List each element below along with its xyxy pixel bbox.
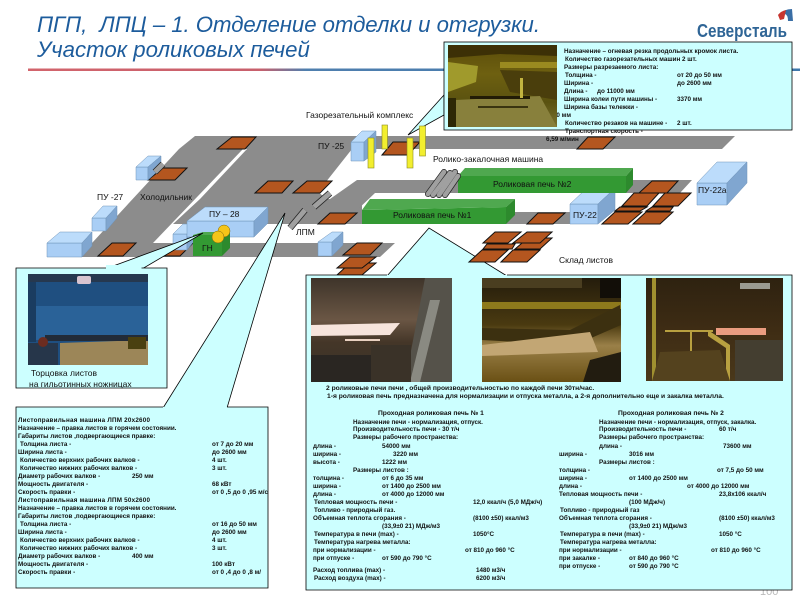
text: LPM specs: Листоправильная машина ЛПМ 20х2600 (18, 417, 150, 424)
text: furnace 1 specs: (33,9±0 21) МДж/м3 (382, 523, 441, 530)
text: furnace 1 specs: от 1400 до 2500 мм (382, 483, 441, 490)
text: furnace 1 specs: Проходная роликовая печь № 1 (378, 410, 484, 417)
text: furnace 1 specs: 1222 мм (382, 459, 407, 466)
text: furnace 1 specs: высота - (313, 459, 340, 466)
text: gas cutting specs: Ширина - (564, 80, 593, 87)
text: LPM specs: от 16 до 50 мм (212, 521, 257, 528)
text: LPM specs: Ширина листа - (18, 529, 67, 536)
title rule (28, 68, 800, 71)
text: gas cutting specs: до 2600 мм (677, 80, 712, 87)
text: furnace 1 specs: при нормализации - (313, 547, 376, 554)
scheme labels (97, 110, 727, 265)
box: PU-28 (187, 207, 268, 237)
text: LPM specs: Количество нижних рабочих валков - (20, 544, 137, 552)
text: LPM specs: 3 шт. (212, 545, 227, 552)
scheme labels: Ролико-закалочная машина (433, 154, 543, 164)
text: furnace 2 specs: 73600 мм (723, 443, 752, 450)
text: LPM specs: Мощность двигателя - (18, 561, 88, 568)
text: furnace intro: 2 роликовые печи печи , общей производительностью по каждой печи 30тн/час. (326, 384, 594, 392)
scheme labels: Роликовая печь №2 (493, 179, 572, 189)
text: furnace 1 specs: от 590 до 790 °С (382, 554, 432, 562)
scheme labels: Склад листов (559, 255, 613, 265)
scheme labels: Газорезательный комплекс (306, 110, 414, 120)
text: furnace 2 specs: длина - (559, 483, 582, 490)
text: LPM specs: от 0 ,5 до 0 ,95 м/с (212, 489, 269, 496)
text: furnace 2 specs: Температура в печи (max) - (560, 531, 645, 538)
blue and green units (47, 131, 747, 257)
caption: Торцовка листов (31, 368, 97, 378)
text: LPM specs: 3 шт. (212, 465, 227, 472)
callout pointer: furnaces (387, 228, 507, 276)
scheme labels: ЛПМ (296, 227, 315, 237)
panel: guillotine shears (16, 265, 167, 389)
text: furnace 2 specs: Назначение печи - нормализация, отпуск, закалка. (599, 419, 757, 426)
box: cooler (136, 156, 161, 180)
text: furnace intro (326, 384, 724, 400)
title (36, 12, 540, 62)
photo: furnace 2 (646, 278, 783, 381)
text: LPM specs: 100 кВт (212, 561, 235, 568)
LPM rollers (155, 164, 330, 228)
text: LPM specs: Количество верхних рабочих валков - (20, 536, 140, 544)
box: PU-22a (697, 162, 747, 205)
panel: furnaces (306, 275, 792, 590)
callout pointer: LPM (163, 213, 285, 408)
text: gas cutting specs: Количество резаков на машине - (565, 120, 667, 127)
text: LPM specs: Назначение – правка листов в горячем состоянии. (18, 505, 177, 512)
text: furnace 1 specs: Производительность печи - 30 т/ч (353, 426, 460, 433)
text: LPM specs: от 0 ,4 до 0 ,8 м/ (212, 569, 261, 576)
text: furnace 2 specs (559, 410, 775, 570)
warehouse sheet stack (337, 232, 552, 275)
text: furnace 1 specs: ширина - (313, 483, 341, 490)
text: furnace 1 specs: 54000 мм (382, 443, 411, 450)
box: PU-25 (351, 131, 376, 161)
text: LPM specs: Диаметр рабочих валков - (18, 472, 100, 480)
text: furnace 1 specs: (8100 ±50) ккал/м3 (473, 515, 529, 522)
text: furnace 1 specs: 12,0 ккал/ч (5,0 МДж/ч) (473, 499, 542, 506)
text: furnace 1 specs: от 4000 до 12000 мм (382, 491, 445, 498)
text: LPM specs: Ширина листа - (18, 449, 67, 456)
text: furnace 2 specs: 1050 °С (719, 530, 742, 538)
text: furnace 2 specs: 23,8х106 ккал/ч (719, 491, 767, 498)
title: Участок роликовых печей (36, 37, 310, 62)
text: furnace 2 specs: от 1400 до 2500 мм (629, 475, 688, 482)
roller quenching machine pipes (428, 172, 458, 195)
text: furnace 1 specs: длина - (313, 443, 336, 450)
text: furnace 1 specs: толщина - (313, 475, 344, 482)
text: gas cutting specs: Длина - (564, 88, 588, 95)
text: furnace 1 specs: Температура в печи (max) - (314, 531, 399, 538)
text: LPM specs: 250 мм (132, 473, 154, 480)
text: furnace 1 specs: Тепловая мощность печи - (314, 499, 397, 506)
text: gas cutting specs: Назначение – огневая резка продольных кромок листа. (564, 48, 739, 55)
text: gas cutting specs: Толщина - (565, 72, 596, 79)
text: furnace 1 specs: от 6 до 35 мм (382, 475, 424, 482)
photo: guillotine (28, 274, 148, 365)
caption (29, 368, 132, 389)
text: gas cutting specs: от 20 до 50 мм (677, 72, 722, 79)
furnace 1 (362, 199, 515, 224)
GN unit (193, 225, 230, 256)
text: furnace 1 specs: 1050°С (473, 530, 495, 538)
yellow posts (368, 125, 426, 168)
box: PU-22 (570, 188, 615, 224)
text: furnace 1 specs: при отпуске - (313, 555, 354, 562)
text: furnace 1 specs: Размеры рабочего пространства: (353, 433, 458, 441)
text: gas cutting specs: Транспортная скорость - (565, 128, 643, 135)
scheme labels: ПУ-22а (698, 185, 727, 195)
text: LPM specs: Скорость правки - (18, 569, 75, 576)
text: furnace 1 specs: 6200 м3/ч (476, 575, 506, 582)
text: furnace 2 specs: от 4000 до 12000 мм (687, 483, 750, 490)
text: furnace 1 specs: Топливо - природный газ. (314, 506, 395, 514)
text: LPM specs: от 7 до 20 мм (212, 441, 254, 448)
scheme labels: Холодильник (140, 192, 192, 202)
text: LPM specs: Количество верхних рабочих валков - (20, 456, 140, 464)
text: furnace 2 specs: ширина - (559, 475, 587, 482)
plant floor scheme (78, 136, 735, 257)
text: furnace 1 specs (313, 410, 542, 582)
text: furnace 1 specs: от 810 до 960 °С (465, 546, 515, 554)
text: furnace 1 specs: 1480 м3/ч (476, 567, 506, 574)
text: furnace 2 specs: Проходная роликовая печь № 2 (618, 410, 724, 417)
text: furnace 2 specs: от 7,5 до 50 мм (717, 467, 764, 474)
text: LPM specs: Габариты листов ,подвергающиеся правке: (18, 432, 155, 440)
panel: LPM specs (16, 407, 269, 588)
text: furnace 1 specs: Назначение печи - нормализация, отпуск. (353, 419, 483, 426)
text: furnace 1 specs: Расход воздуха (max) - (314, 575, 386, 582)
text: LPM specs: 400 мм (132, 553, 154, 560)
photo: furnace roller table (482, 278, 621, 382)
text: furnace 1 specs: 3220 мм (393, 451, 418, 458)
text: furnace 1 specs: ширина - (313, 451, 341, 458)
text: gas cutting specs: Размеры разрезаемого листа: (564, 64, 658, 71)
text: LPM specs: Мощность двигателя - (18, 481, 88, 488)
text: furnace 2 specs: при нормализации - (559, 547, 622, 554)
text: LPM specs (18, 417, 269, 576)
text: LPM specs: Габариты листов ,подвергающиеся правке: (18, 512, 155, 520)
text: furnace 2 specs: от 840 до 960 °С (629, 554, 679, 562)
text: furnace 2 specs: длина - (599, 443, 622, 450)
text: furnace 2 specs: Производительность печи - (599, 426, 686, 433)
text: LPM specs: 4 шт. (212, 457, 227, 464)
sheets on the floor (98, 137, 691, 256)
page number: 100 (760, 586, 778, 598)
photo: furnace exit (311, 278, 452, 382)
text: LPM specs: до 2600 мм (212, 449, 247, 456)
scheme labels: ПУ -25 (318, 141, 344, 151)
text: LPM specs: Назначение – правка листов в горячем состоянии. (18, 425, 177, 432)
scheme labels: ПУ – 28 (209, 209, 240, 219)
box: near GN (173, 224, 198, 250)
text: gas cutting specs: Количество газорезательных машин 2 шт. (565, 56, 697, 63)
callout pointer: gas cutting complex (408, 95, 444, 135)
text: furnace 2 specs: Объемная теплота сгорания - (559, 514, 652, 522)
photo: gas cutting machine (448, 45, 557, 127)
text: furnace 1 specs: длина - (313, 491, 336, 498)
text: furnace 1 specs: Размеры листов : (353, 467, 409, 474)
text: furnace 2 specs: от 590 до 790 °С (629, 562, 679, 570)
text: furnace 2 specs: 60 т/ч (719, 426, 737, 433)
text: furnace 1 specs: Температура нагрева металла: (314, 539, 411, 546)
text: gas cutting specs: 2 шт. (677, 120, 692, 127)
scheme labels: ГН (202, 243, 213, 253)
text: gas cutting specs: Ширина базы тележки - (564, 103, 638, 111)
box: near stack (318, 232, 343, 256)
text: LPM specs: Количество нижних рабочих валков - (20, 464, 137, 472)
text: furnace intro: 1-я роликовая печь предназначена для нормализации и отпуска металла, а 2-я дополнительно еще и закалка металла. (327, 393, 724, 400)
text: furnace 2 specs: (33,9±0 21) МДж/м3 (629, 523, 688, 530)
text: furnace 2 specs: от 810 до 960 °С (711, 546, 761, 554)
text: furnace 2 specs: 3016 мм (629, 451, 654, 458)
text: furnace 2 specs: Топливо - природный газ (560, 506, 639, 514)
text: furnace 2 specs: (100 МДж/ч) (629, 499, 665, 506)
callout pointer: guillotine (105, 233, 203, 269)
text: LPM specs: 4 шт. (212, 537, 227, 544)
text: gas cutting specs (546, 48, 739, 143)
text: furnace 1 specs: Расход топлива (max) - (313, 567, 385, 574)
text: LPM specs: до 2600 мм (212, 529, 247, 536)
text: furnace 1 specs: Объемная теплота сгорания - (313, 514, 406, 522)
text: LPM specs: Диаметр рабочих валков - (18, 552, 100, 560)
logo: Severstal (697, 9, 793, 41)
text: gas cutting specs: Ширина колеи пути машины - (564, 96, 657, 103)
text: furnace 2 specs: Температура нагрева металла: (560, 539, 657, 546)
furnace 2 (458, 168, 633, 193)
text: gas cutting specs: 3150 мм (546, 112, 571, 119)
title: ПГП, ЛПЦ – 1. Отделение отделки и отгрузки. (37, 12, 540, 37)
text: LPM specs: Скорость правки - (18, 489, 75, 496)
text: furnace 2 specs: толщина - (559, 467, 590, 474)
scheme labels: ПУ-22 (573, 210, 597, 220)
text: gas cutting specs: до 11000 мм (597, 88, 635, 95)
text: LPM specs: Листоправильная машина ЛПМ 50х2600 (18, 497, 150, 504)
text: LPM specs: Толщина листа - (20, 441, 71, 448)
gas cutting panel (444, 42, 792, 143)
text: furnace 2 specs: ширина - (559, 451, 587, 458)
text: furnace 2 specs: Тепловая мощность печи - (559, 491, 642, 498)
text: gas cutting specs: 3370 мм (677, 96, 702, 103)
caption: на гильотинных ножницах (29, 379, 132, 389)
text: furnace 2 specs: Размеры рабочего пространства: (599, 433, 704, 441)
text: furnace 2 specs: (8100 ±50) ккал/м3 (719, 515, 775, 522)
box: lower left (47, 232, 92, 257)
scheme labels: ПУ -27 (97, 192, 123, 202)
scheme labels: Роликовая печь №1 (393, 210, 472, 220)
text: furnace 2 specs: Размеры листов : (599, 459, 655, 466)
text: furnace 2 specs: при закалке - (559, 555, 600, 562)
text: furnace 2 specs: при отпуске - (559, 563, 600, 570)
box: PU-27 (92, 206, 117, 231)
text: LPM specs: Толщина листа - (20, 521, 71, 528)
text: gas cutting specs: 6,59 м/мин (546, 136, 579, 143)
text: LPM specs: 68 кВт (212, 481, 231, 488)
